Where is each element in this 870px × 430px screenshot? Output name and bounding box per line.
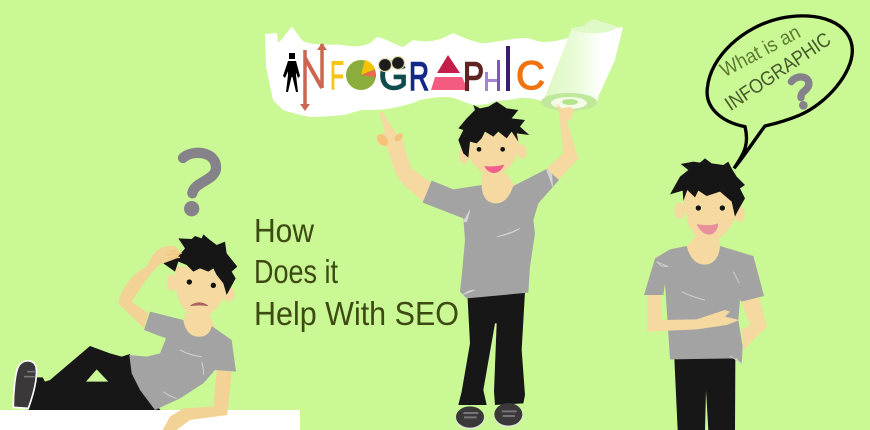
neck (482, 173, 515, 207)
neck (183, 312, 215, 340)
icon: person as letter I (283, 53, 300, 92)
left arm (647, 295, 739, 332)
character: centre figure pointing up (375, 102, 578, 429)
white floor (0, 410, 300, 430)
banner: torn paper infographic (265, 20, 623, 117)
raised arm (118, 246, 182, 328)
infographic wordmark: R (409, 55, 429, 99)
icon: large question mark (183, 153, 216, 216)
right arm (547, 103, 578, 180)
heading: How Does it Help With SEO: Does it (254, 254, 339, 291)
bubble text: INFOGRAPHIC: INFOGRAPHIC (721, 29, 835, 115)
callout: speech bubble (707, 16, 852, 168)
shoe (13, 361, 36, 408)
head (458, 102, 529, 177)
infographic wordmark: P (463, 55, 484, 99)
character: right figure asking question (644, 158, 767, 430)
bubble text: What is an: What is an (717, 21, 804, 82)
trousers (674, 358, 735, 430)
icon: light cone (541, 20, 618, 111)
shirt (423, 169, 559, 298)
infographic wordmark (283, 43, 545, 111)
letter N with arrows (300, 43, 327, 111)
left arm (376, 111, 432, 202)
trousers (28, 346, 161, 410)
heading: How Does it Help With SEO: How (254, 213, 315, 250)
infographic wordmark: F (330, 54, 344, 98)
triangle as letter A (431, 55, 468, 90)
shirt (129, 312, 236, 410)
shoes (456, 403, 523, 429)
infographic wordmark: G (379, 54, 408, 98)
lower arm (163, 370, 232, 430)
neck (687, 233, 722, 270)
infographic wordmark: C (516, 54, 545, 98)
letter H (485, 60, 500, 91)
icon: small question mark (791, 77, 809, 110)
heading: How Does it Help With SEO (254, 213, 459, 333)
heading: How Does it Help With SEO: Help With SEO (254, 296, 459, 333)
right arm (742, 293, 767, 350)
head (163, 234, 237, 317)
icon: sunglasses (378, 56, 404, 72)
trousers (458, 292, 525, 405)
head (670, 158, 745, 243)
character: reclining figure scratching head (13, 234, 237, 430)
shirt (644, 246, 764, 364)
pie chart as letter O (346, 60, 376, 90)
